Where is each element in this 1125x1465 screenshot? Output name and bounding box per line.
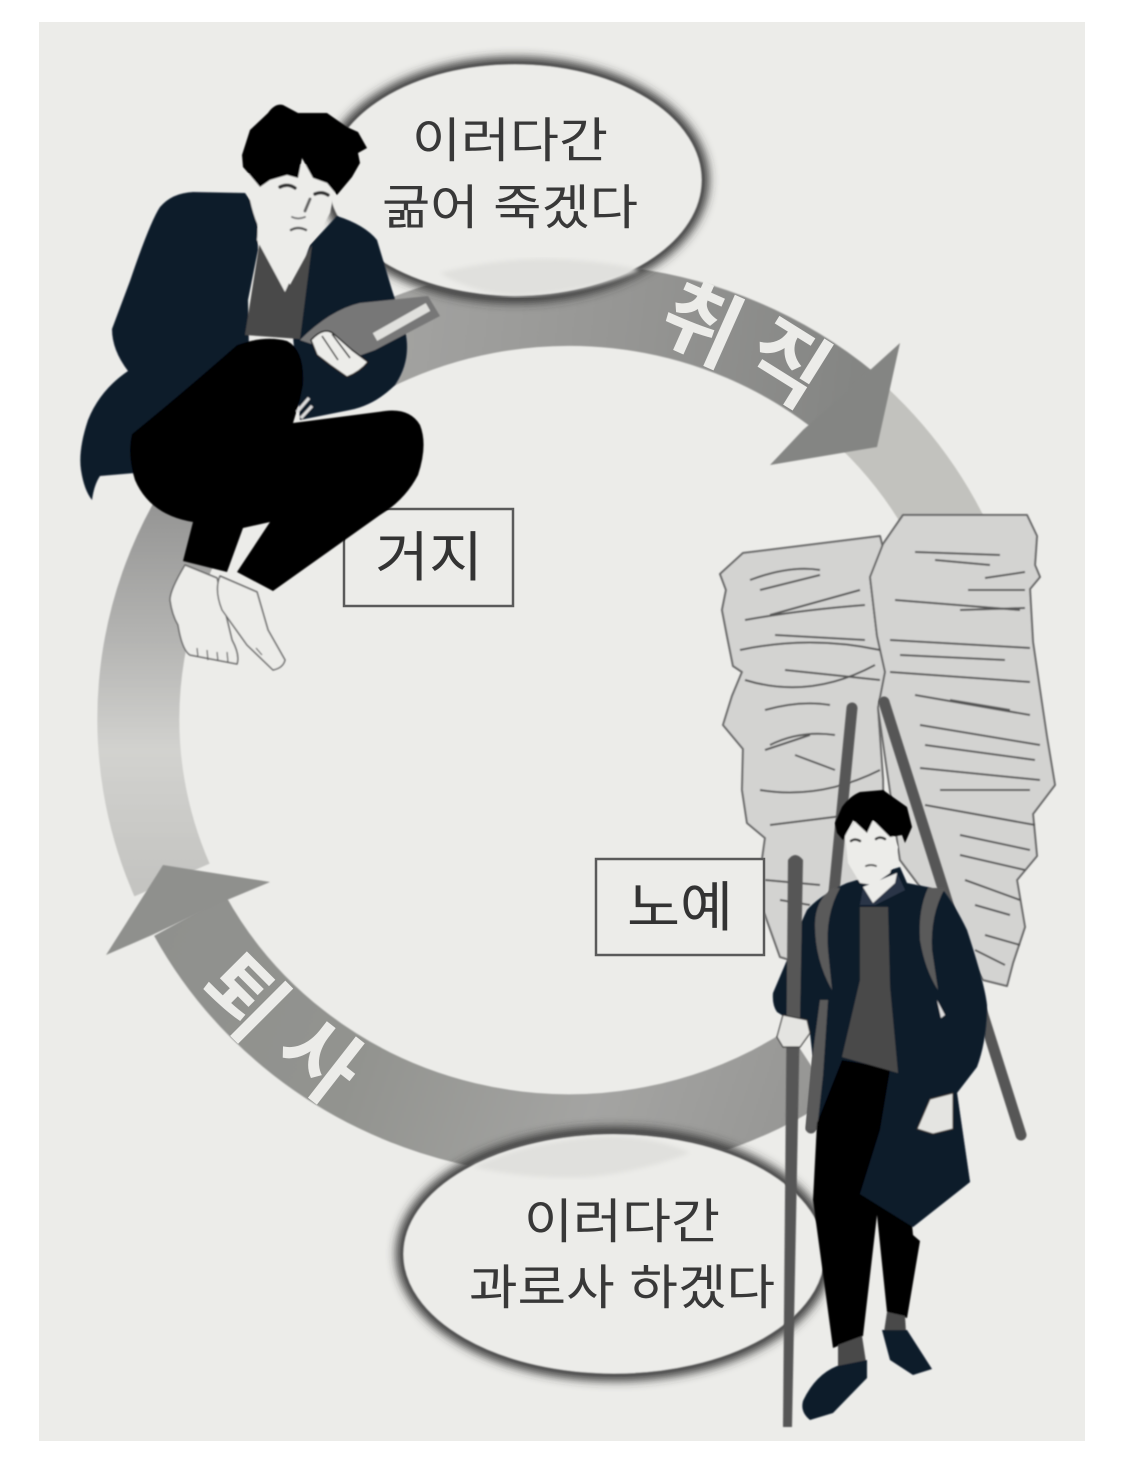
arc label: 퇴사 — [182, 936, 378, 1121]
label box: 거지 — [344, 509, 513, 606]
trousers — [130, 339, 424, 591]
sweater — [842, 907, 898, 1073]
book — [300, 296, 440, 358]
paper lines — [740, 552, 1040, 965]
label box: 노예: 노예 — [627, 878, 733, 938]
shirt hem stripes — [297, 398, 312, 418]
ring segment: fading right arc — [846, 402, 973, 590]
ring segment: left arc — [138, 497, 205, 880]
hand — [311, 331, 368, 377]
left stack — [720, 536, 885, 960]
hair — [835, 790, 912, 843]
paper stacks — [720, 515, 1055, 986]
speech bubble: overwork — [402, 1133, 826, 1375]
collar — [860, 873, 905, 905]
face — [247, 165, 335, 253]
shoes — [802, 1360, 867, 1420]
shirt — [245, 240, 312, 339]
label box: 노예 — [596, 859, 764, 955]
bare feet — [170, 565, 238, 664]
trousers — [813, 1060, 920, 1348]
bubble text: starving: 굶어 죽겠다 — [382, 182, 638, 235]
front pole — [783, 855, 803, 1427]
bubble text: starving: 이러다간 — [412, 115, 608, 168]
face — [845, 815, 898, 885]
coat — [773, 867, 987, 1227]
back poles — [811, 702, 1021, 1135]
arc label: 취직: 직 — [729, 304, 845, 424]
bubble text: overwork — [469, 1196, 775, 1315]
facial features — [280, 185, 328, 230]
right stack — [870, 515, 1055, 986]
arc label: 퇴사: 퇴 — [182, 936, 304, 1058]
jacket — [80, 192, 258, 500]
hair — [242, 105, 367, 195]
arrow head: 취직 — [770, 343, 900, 465]
coat right flap — [860, 1065, 970, 1227]
ring segment: 퇴사 arc — [190, 916, 810, 1135]
bubble text: starving — [382, 115, 638, 235]
coat lining — [806, 1000, 828, 1130]
toes — [197, 648, 262, 662]
socks — [838, 1312, 906, 1370]
bubble text: overwork: 이러다간 — [524, 1196, 720, 1249]
arc label: 취직: 취 — [647, 266, 755, 384]
label box: 거지: 거지 — [375, 528, 483, 588]
arc label: 취직 — [647, 266, 845, 424]
arc label: 퇴사: 사 — [260, 999, 378, 1121]
speech bubble: starving — [327, 63, 703, 297]
hands — [777, 1015, 810, 1047]
figure: crouching jobless man with book — [80, 105, 440, 670]
arrow head: 퇴사 — [106, 865, 270, 955]
facial features — [851, 838, 885, 866]
figure: standing overworked man with pole — [773, 790, 987, 1427]
cycle ring — [138, 305, 973, 1135]
neck — [257, 228, 305, 292]
bubble text: overwork: 과로사 하겠다 — [469, 1262, 775, 1315]
backpack straps — [815, 888, 840, 990]
ring segment: 취직 arc — [370, 305, 848, 404]
